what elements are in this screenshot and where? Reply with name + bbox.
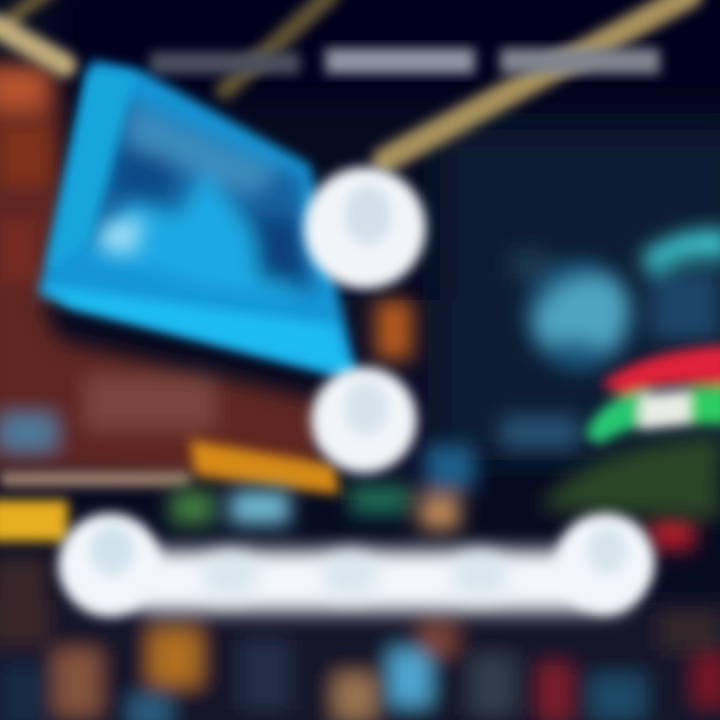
yellow awning	[0, 472, 190, 542]
icon: bottom middle circle 2	[322, 551, 378, 599]
panel: blue billboard	[38, 60, 358, 382]
icon: bottom left circle	[58, 513, 162, 617]
blurred heading	[150, 48, 660, 74]
panel: night sky	[60, 0, 720, 500]
orange banner	[190, 440, 340, 495]
icon: upper white circle	[304, 167, 426, 289]
rope lines	[0, 0, 690, 160]
striped umbrella	[585, 345, 720, 445]
panel: crowd	[0, 555, 720, 720]
billboard lower strip	[42, 70, 352, 375]
billboard highlight	[100, 215, 145, 255]
teal globe sculpture	[500, 229, 720, 450]
billboard inner area	[85, 95, 315, 300]
icon: bottom middle circle 3	[452, 551, 508, 599]
icon: middle white circle	[311, 367, 417, 473]
icon: bottom right circle	[555, 513, 655, 613]
stall colours	[170, 445, 695, 550]
panel: white timeline band	[58, 513, 655, 617]
icon: bottom middle circle 1	[202, 551, 258, 599]
green trees	[540, 435, 720, 520]
panel: brick wall	[0, 60, 413, 480]
